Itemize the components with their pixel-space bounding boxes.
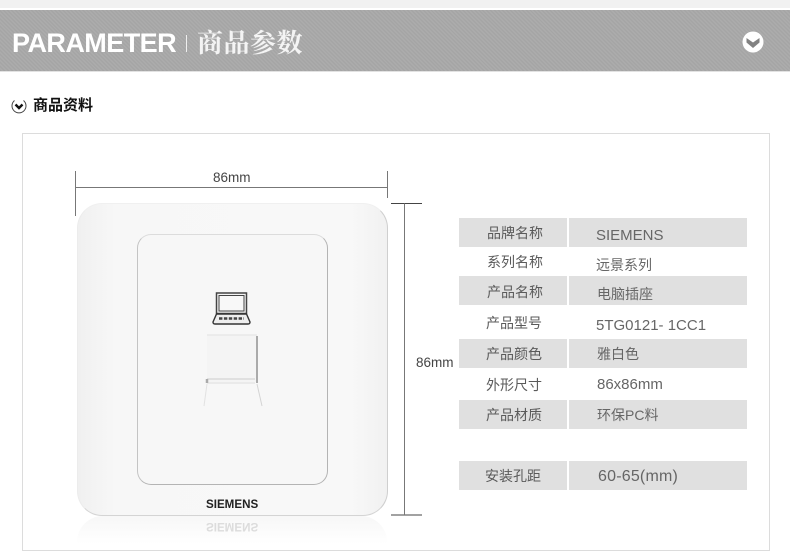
- table: parameters: [459, 218, 747, 490]
- row: product name: [459, 276, 747, 305]
- row: hole spacing: 60-65(mm): [598, 468, 678, 485]
- row: size: 外形尺寸: [486, 377, 542, 393]
- row: product name: 电脑插座: [597, 286, 653, 302]
- row: size: 86x86mm: [597, 376, 663, 393]
- plate body: [77, 203, 388, 516]
- section heading: [12, 97, 93, 114]
- inner panel: [137, 234, 328, 485]
- row: brand: 品牌名称: [487, 225, 543, 241]
- row: material: 环保PC料: [597, 407, 658, 423]
- row: material: 产品材质: [486, 407, 542, 423]
- row: product name: 产品名称: [487, 284, 543, 300]
- top strip: [0, 0, 790, 8]
- reflected logo: SIEMENS: [206, 520, 258, 533]
- row: colour: 产品颜色: [486, 346, 542, 362]
- plate reflection: [77, 516, 387, 549]
- width label: 86mm: [213, 170, 251, 185]
- width dimension line: [75, 171, 388, 216]
- row: series: [487, 254, 652, 273]
- heading: PARAMETER: PARAMETER: [12, 28, 176, 58]
- icon: computer: [212, 292, 251, 325]
- icon: round chevron: [742, 32, 764, 52]
- row: model: 产品型号: [486, 315, 542, 331]
- icon: section chevron: [12, 100, 26, 114]
- row: colour: [459, 339, 747, 368]
- row: size: [486, 376, 663, 393]
- product: socket plate: [77, 203, 388, 516]
- height dimension line: [391, 203, 422, 516]
- panel: product frame: [22, 133, 770, 551]
- heading divider: [186, 35, 187, 52]
- row: series: 系列名称: [487, 254, 543, 270]
- heading: Chinese title: 商品参数: [197, 29, 303, 58]
- row: series: 远景系列: [596, 257, 652, 273]
- row: material: [459, 400, 747, 429]
- height label: 86mm: [416, 355, 454, 370]
- row: hole spacing: 安装孔距: [485, 468, 541, 484]
- row: brand: SIEMENS: [596, 227, 664, 244]
- row: brand: [459, 218, 747, 247]
- row: model: 5TG0121- 1CC1: [596, 317, 706, 334]
- row: colour: 雅白色: [597, 346, 639, 362]
- row: model: [486, 315, 706, 334]
- header banner: [0, 10, 790, 72]
- socket port: [204, 334, 262, 406]
- section title: 商品资料: [33, 97, 93, 114]
- brand logo: SIEMENS: [206, 498, 258, 511]
- row: hole spacing: [459, 461, 747, 490]
